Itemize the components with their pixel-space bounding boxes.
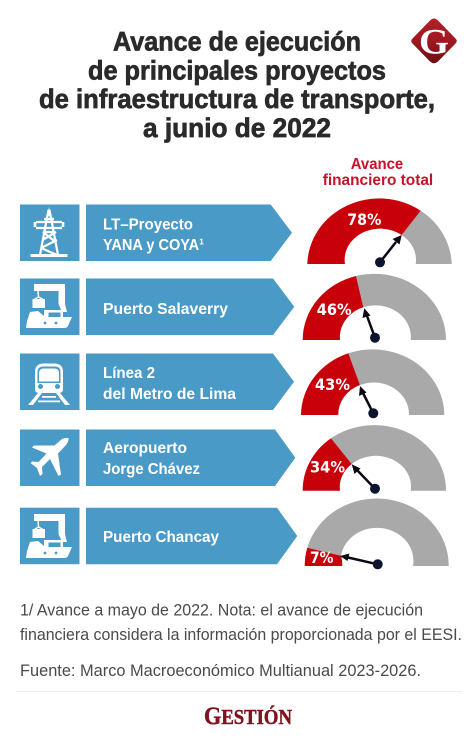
column heading: Avance financiero total: Avance — [351, 156, 403, 173]
row 5: Puerto Chancay — [20, 508, 297, 564]
logo: Gestión G diamond: G — [419, 22, 449, 62]
arrow label — [86, 430, 295, 486]
gauge: 34% — [303, 425, 446, 494]
arrow label — [86, 354, 294, 410]
arrow label: Puerto Salaverry — [103, 301, 228, 318]
gauge: 46% — [303, 274, 446, 343]
icon: transmission tower — [20, 204, 80, 261]
title: a junio de 2022 — [143, 113, 331, 143]
arrow label: del Metro de Lima — [103, 386, 236, 403]
footnote — [20, 602, 462, 644]
logo: Gestion wordmark: GESTIÓN — [204, 703, 292, 730]
arrow label: Aeropuerto — [103, 440, 187, 457]
arrow label: Jorge Chávez — [103, 461, 200, 478]
row 3: Linea 2 del Metro de Lima — [20, 354, 294, 410]
footnote: financiera considera la información proporcionada por el EESI. — [20, 626, 462, 644]
arrow label: Línea 2 — [103, 365, 155, 382]
title: de principales proyectos — [88, 56, 386, 86]
gauge: 7%: 7% — [310, 548, 334, 567]
gauge: 7% — [305, 499, 449, 569]
source: Fuente: Marco Macroeconómico Multianual 2023-2026. — [20, 662, 421, 680]
gauge: 78%: 78% — [347, 210, 381, 229]
icon: train — [20, 354, 80, 410]
arrow label — [86, 508, 297, 564]
logo: Gestión G diamond — [411, 18, 457, 63]
row 4: Aeropuerto Jorge Chavez — [20, 430, 295, 486]
icon: port crane and ship — [20, 508, 80, 564]
row 2: Puerto Salaverry — [20, 278, 294, 335]
gauge: 34%: 34% — [310, 458, 345, 477]
gauge: 43% — [301, 349, 444, 418]
arrow label: YANA y COYA¹ — [103, 237, 204, 254]
icon: port crane and ship — [20, 278, 80, 335]
title — [39, 26, 435, 143]
gauge: 43%: 43% — [315, 375, 350, 394]
row 1: LT-Proyecto YANA y COYA — [20, 204, 292, 261]
arrow label — [86, 278, 294, 335]
icon: airplane — [20, 430, 80, 486]
column heading: Avance financiero total: financiero total — [323, 172, 433, 189]
footnote: 1/ Avance a mayo de 2022. Nota: el avance de ejecución — [20, 602, 423, 620]
column heading: Avance financiero total — [323, 156, 433, 189]
title: Avance de ejecución — [113, 26, 361, 56]
gauge: 46%: 46% — [317, 300, 352, 319]
gauge: 78% — [307, 198, 452, 267]
arrow label — [86, 204, 292, 261]
arrow label: Puerto Chancay — [103, 529, 219, 546]
title: de infraestructura de transporte, — [39, 84, 435, 114]
arrow label: LT–Proyecto — [103, 216, 193, 234]
